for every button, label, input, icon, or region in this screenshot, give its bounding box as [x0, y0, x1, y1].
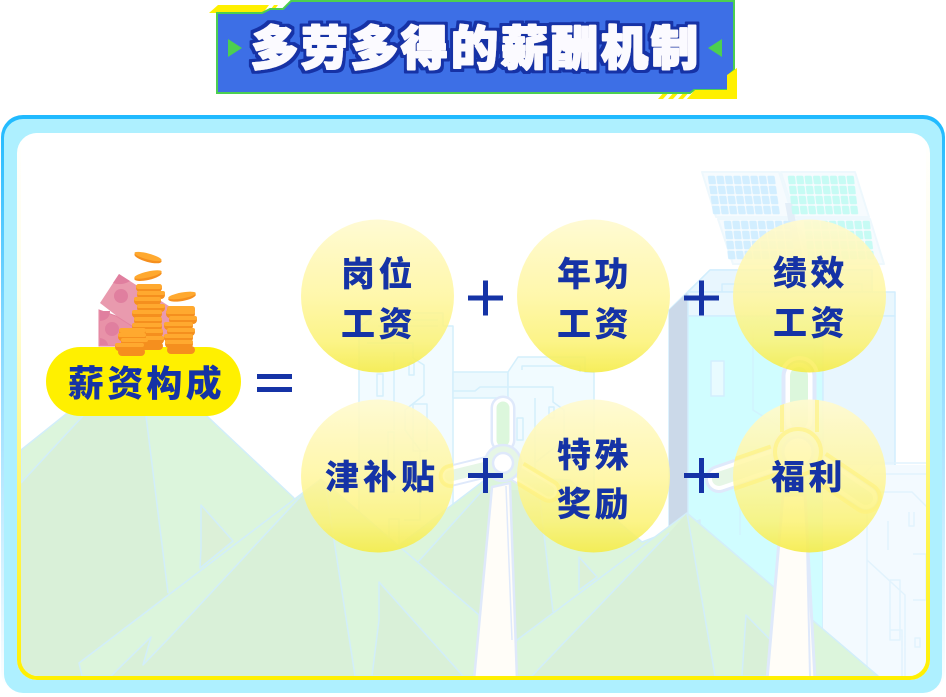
circle: 年功工资 — [517, 220, 670, 372]
plus 1 — [468, 280, 503, 316]
icon: coins — [115, 250, 197, 356]
scene: background illustration — [21, 172, 930, 680]
building: centre with connector — [454, 356, 595, 454]
plus 2 — [684, 280, 719, 316]
circle: 绩效工资 — [733, 220, 886, 372]
circle labels: 福利 — [771, 459, 846, 497]
wind turbine: large — [705, 368, 816, 676]
circle: 岗位工资: 工资 — [341, 306, 416, 344]
stack C — [115, 328, 148, 356]
label pill — [46, 347, 241, 416]
circle: 年功工资: 年功 — [557, 256, 632, 294]
mountain: left — [21, 413, 295, 676]
title text: 多劳多得的薪酬机制 — [251, 22, 701, 75]
pill text: 薪资构成 — [68, 363, 225, 404]
building: large right — [669, 270, 930, 676]
turbine tint inside circles — [438, 358, 885, 517]
circle: 特殊奖励 — [517, 400, 670, 552]
right arrow — [708, 39, 722, 57]
stack A — [132, 284, 165, 350]
left arrow — [228, 39, 242, 57]
building: left middle — [358, 325, 454, 507]
wind turbine: small — [453, 396, 520, 676]
flying coins — [133, 250, 196, 303]
banner body — [217, 1, 734, 93]
title banner — [209, 1, 737, 99]
circle: 岗位工资 — [301, 220, 454, 372]
circle labels — [325, 255, 848, 524]
mountain: right — [500, 513, 878, 676]
banner corner fill — [687, 68, 737, 99]
circle: 津补贴 — [301, 400, 454, 552]
circle: 福利 — [733, 400, 886, 552]
circle labels: 奖励 — [557, 486, 632, 524]
stack B — [164, 306, 197, 354]
banner accents — [209, 5, 737, 99]
solar panels — [702, 172, 884, 273]
icon: bills — [99, 274, 172, 346]
circle labels: 绩效 — [773, 255, 848, 293]
equals sign — [257, 374, 292, 392]
plus 3 — [468, 458, 503, 493]
circle labels: 特殊 — [557, 437, 632, 475]
circle: 岗位工资: 岗位 — [341, 255, 416, 294]
mountain: centre left — [79, 479, 479, 676]
mountain: third behind turbine — [402, 478, 700, 639]
circle: 年功工资: 工资 — [557, 306, 632, 344]
circle labels: 工资 — [773, 305, 848, 343]
plus 4 — [684, 458, 719, 493]
circle labels: 津补贴 — [325, 459, 439, 497]
